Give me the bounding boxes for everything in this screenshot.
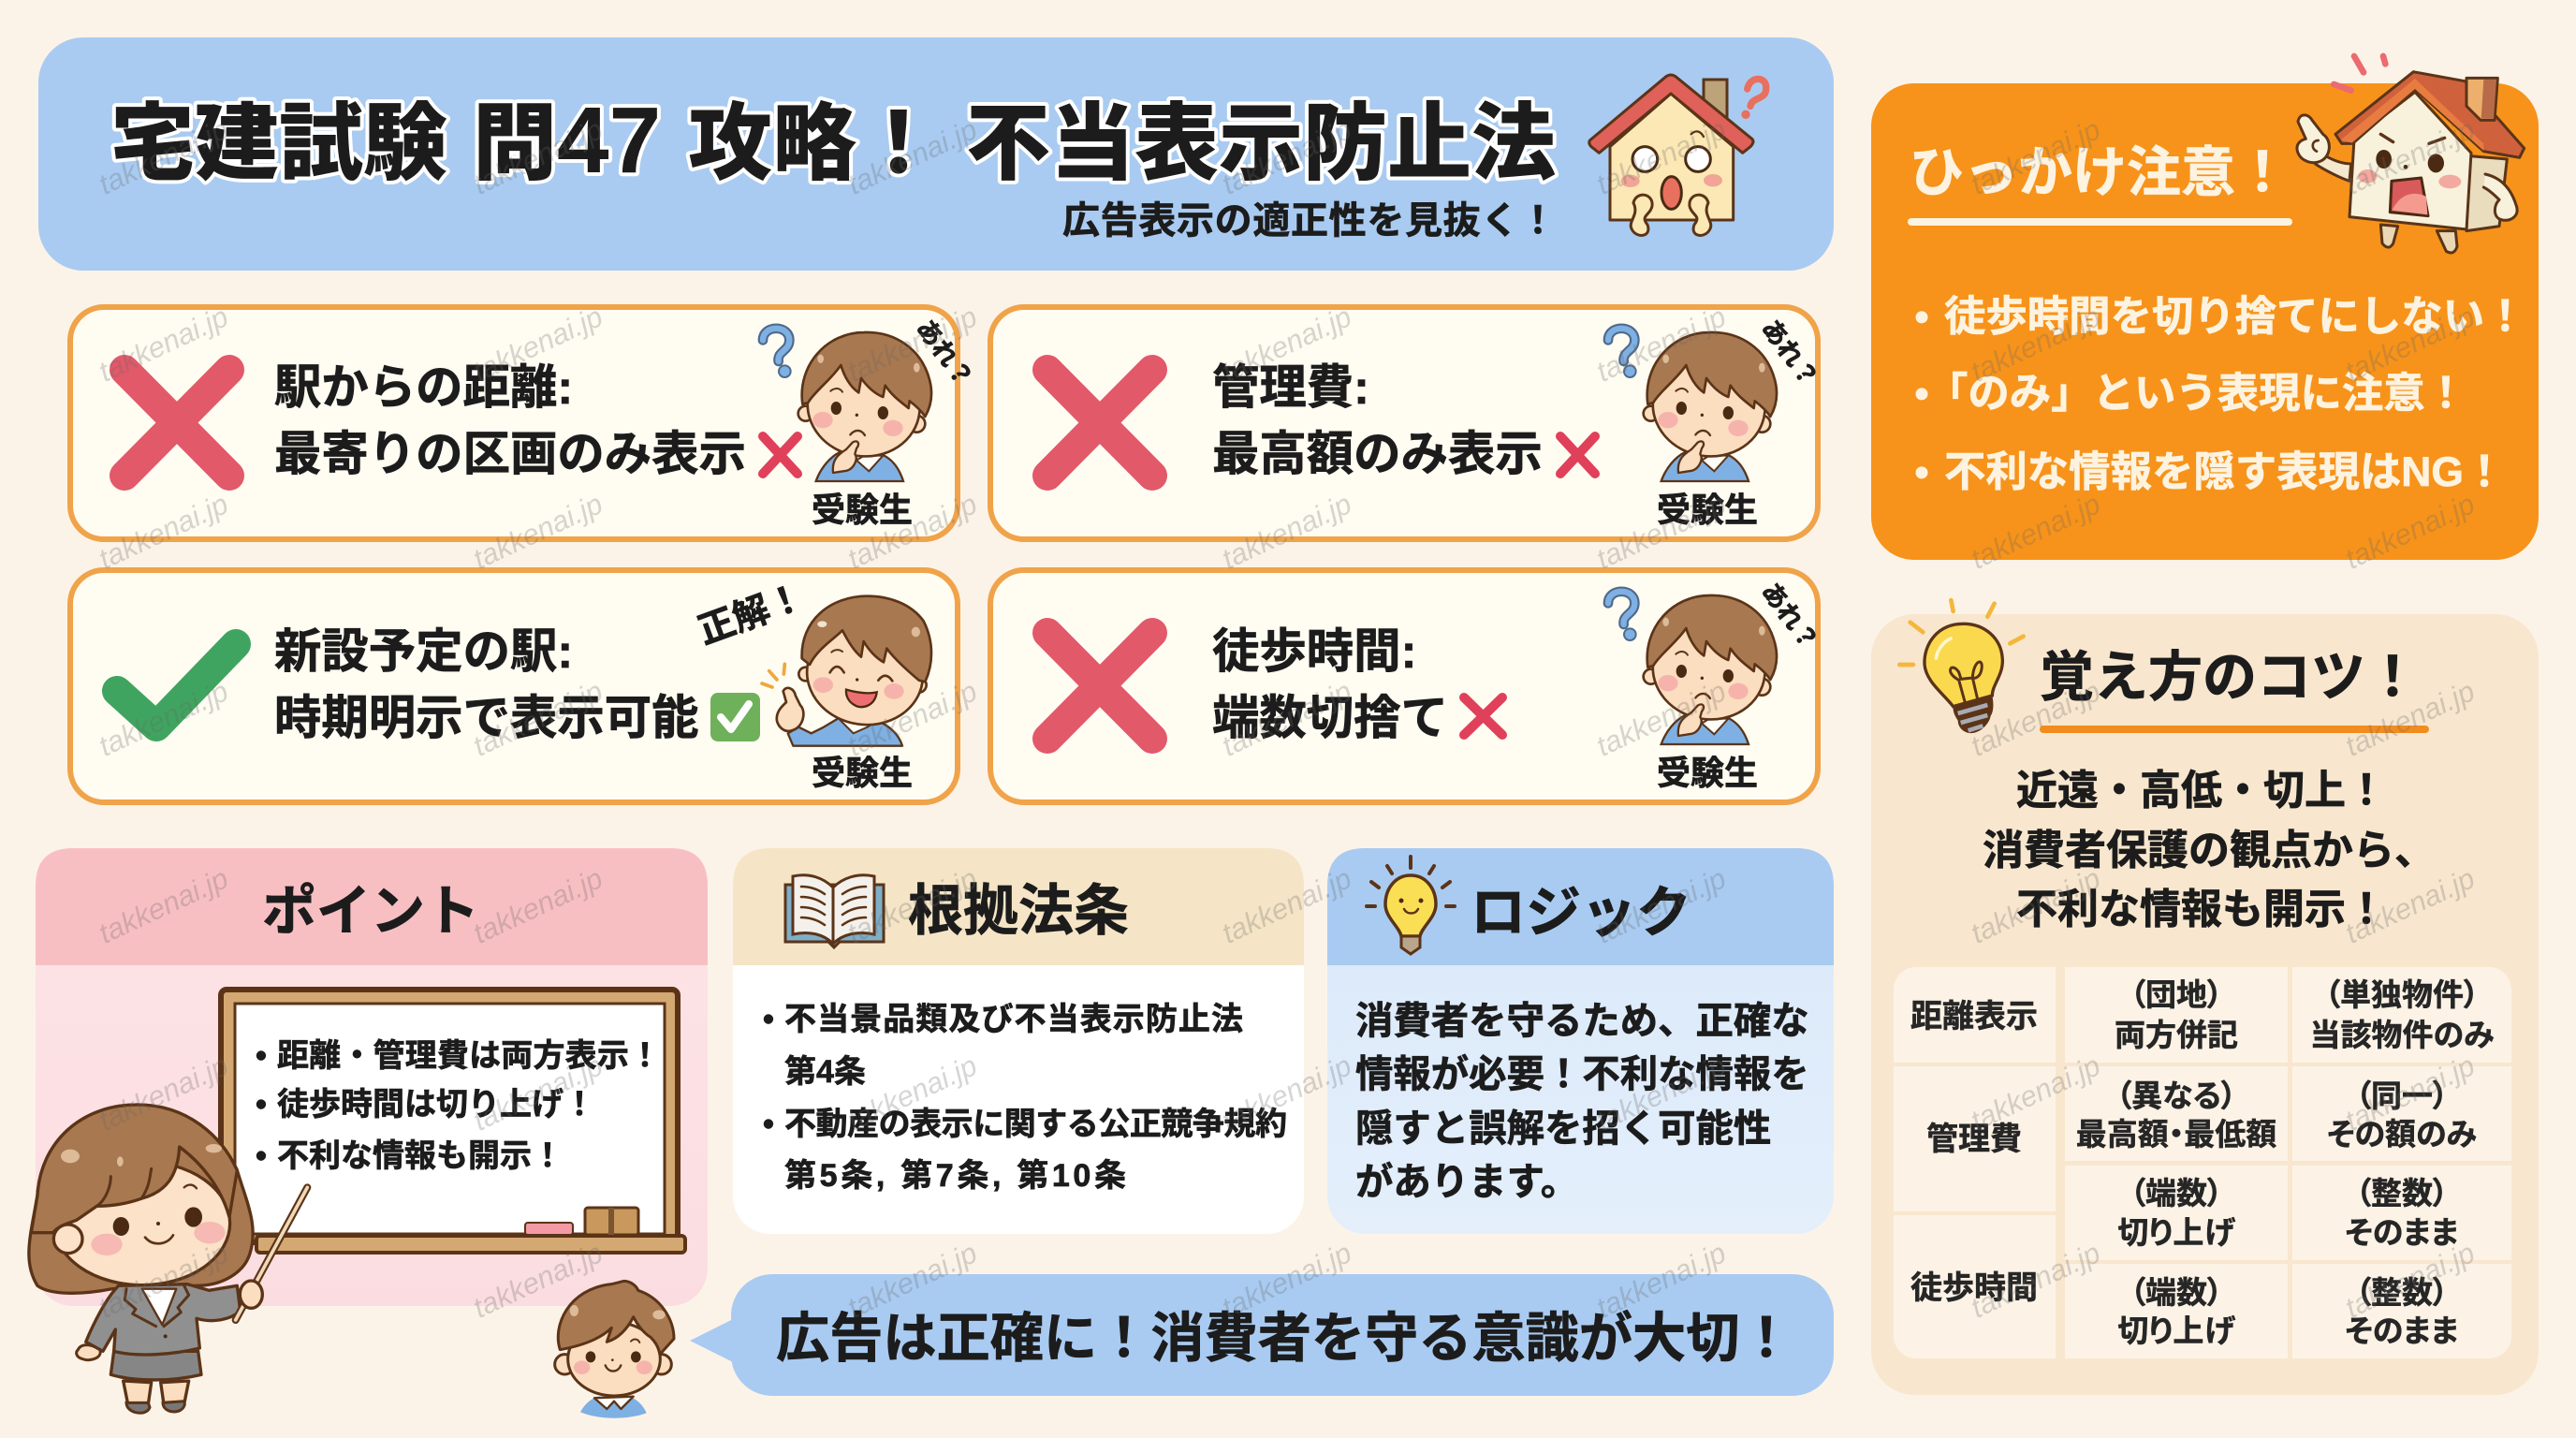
watermark grid: takkenai.jp bbox=[842, 487, 982, 576]
watermark grid: takkenai.jp bbox=[1217, 1049, 1356, 1137]
panel header bbox=[1327, 848, 1834, 965]
icon: cross bbox=[124, 370, 229, 476]
icon: check mark bbox=[117, 644, 236, 726]
label: student: 受験生 bbox=[1657, 754, 1758, 792]
comparison table: （整数） bbox=[2355, 1275, 2449, 1310]
watermark grid: takkenai.jp bbox=[842, 674, 982, 763]
warning list: • bbox=[1914, 450, 1929, 495]
watermark grid: takkenai.jp bbox=[2340, 487, 2480, 576]
watermark grid: takkenai.jp bbox=[468, 112, 607, 201]
panel: point bbox=[36, 848, 708, 1306]
heading: 根拠法条 bbox=[908, 880, 1129, 942]
logic text: 隠すと誤解を招く可能性 bbox=[1355, 1107, 1771, 1150]
tip text: 不利な情報も開示！ bbox=[2016, 887, 2387, 932]
logic text: 情報が必要！不利な情報を bbox=[1355, 1052, 1809, 1095]
text block bbox=[1212, 624, 1448, 744]
watermark grid: takkenai.jp bbox=[468, 1049, 607, 1137]
legal text list: • bbox=[763, 1107, 774, 1142]
title: 宅建試験 bbox=[110, 97, 447, 191]
logic text: があります。 bbox=[1355, 1160, 1578, 1203]
watermark grid: takkenai.jp bbox=[94, 487, 233, 576]
watermark grid bbox=[94, 112, 2480, 1325]
watermark grid: takkenai.jp bbox=[1217, 487, 1356, 576]
panel: card new station bbox=[70, 570, 958, 802]
callout: 広告は正確に！消費者を守る意識が大切！ bbox=[776, 1309, 1793, 1369]
warning list: 不利な情報を隠す表現はNG！ bbox=[1944, 449, 2505, 495]
watermark grid: takkenai.jp bbox=[2340, 112, 2480, 201]
comparison table: そのまま bbox=[2345, 1313, 2459, 1348]
title: 不当表示防止法 bbox=[966, 97, 1556, 191]
icon: light bulb bbox=[1899, 600, 2024, 733]
legal text list: 第4条 bbox=[784, 1054, 866, 1090]
icon: small cross bbox=[1560, 436, 1595, 474]
icon: small check box bbox=[710, 693, 760, 741]
speech: correct: 正解！ bbox=[693, 577, 810, 652]
title: 問47 bbox=[473, 88, 661, 193]
text block: 時期明示で表示可能 bbox=[274, 691, 699, 744]
comparison table: 両方併記 bbox=[2115, 1018, 2238, 1052]
watermark grid: takkenai.jp bbox=[1591, 1236, 1731, 1325]
warning list bbox=[1914, 294, 2525, 495]
icon: surprised house bbox=[1589, 75, 1766, 235]
tip text: 近遠・高低・切上！ bbox=[2016, 768, 2387, 814]
comparison table: （同一） bbox=[2355, 1078, 2449, 1113]
watermark grid: takkenai.jp bbox=[1966, 487, 2105, 576]
heading underline bbox=[1908, 218, 2292, 226]
watermark grid: takkenai.jp bbox=[1966, 1236, 2105, 1325]
watermark grid: takkenai.jp bbox=[1217, 674, 1356, 763]
watermark grid: takkenai.jp bbox=[2340, 1236, 2480, 1325]
whiteboard bbox=[221, 990, 685, 1253]
comparison table: そのまま bbox=[2345, 1215, 2459, 1250]
watermark grid: takkenai.jp bbox=[842, 112, 982, 201]
comparison table: 当該物件のみ bbox=[2310, 1018, 2494, 1052]
watermark grid: takkenai.jp bbox=[1591, 487, 1731, 576]
heading: ロジック bbox=[1471, 882, 1691, 944]
watermark grid: takkenai.jp bbox=[94, 1236, 233, 1325]
comparison table: 最高額・最低額 bbox=[2076, 1117, 2276, 1152]
watermark grid: takkenai.jp bbox=[468, 300, 607, 389]
whiteboard bullet list: • bbox=[256, 1087, 267, 1123]
text block bbox=[274, 360, 746, 480]
text block bbox=[1212, 360, 1543, 480]
text block: 新設予定の駅: bbox=[274, 624, 573, 678]
logic text bbox=[1355, 999, 1809, 1203]
watermark grid: takkenai.jp bbox=[1591, 300, 1731, 389]
comparison table: その額のみ bbox=[2327, 1117, 2477, 1152]
watermark grid: takkenai.jp bbox=[94, 112, 233, 201]
character: puzzled student bbox=[1608, 329, 1777, 481]
watermark grid: takkenai.jp bbox=[1966, 112, 2105, 201]
tip text: 消費者保護の観点から、 bbox=[1983, 828, 2436, 873]
character: small student bbox=[555, 1281, 674, 1418]
title: 攻略！ bbox=[688, 97, 941, 191]
watermark grid: takkenai.jp bbox=[2340, 1049, 2480, 1137]
panel: card management fee bbox=[990, 307, 1823, 539]
comparison table: 徒歩時間 bbox=[1910, 1270, 2038, 1306]
comparison table: （団地） bbox=[2130, 977, 2222, 1012]
heading: ポイント bbox=[262, 881, 479, 942]
comparison table: 切り上げ bbox=[2117, 1313, 2236, 1348]
watermark grid: takkenai.jp bbox=[1591, 112, 1731, 201]
text block: 最高額のみ表示 bbox=[1212, 427, 1543, 480]
icon: small cross bbox=[1464, 697, 1502, 735]
panel: card walking time bbox=[990, 570, 1823, 802]
watermark grid: takkenai.jp bbox=[1966, 300, 2105, 389]
comparison table: （端数） bbox=[2130, 1275, 2222, 1310]
text block: 管理費: bbox=[1212, 360, 1369, 414]
label: student: 受験生 bbox=[812, 754, 913, 792]
comparison table: 切り上げ bbox=[2117, 1215, 2236, 1250]
comparison table: （整数） bbox=[2355, 1176, 2449, 1211]
speech: are: あれ？ bbox=[1756, 315, 1823, 392]
watermark grid: takkenai.jp bbox=[1217, 300, 1356, 389]
whiteboard bullet list bbox=[256, 1038, 661, 1174]
speech: are: あれ？ bbox=[1756, 578, 1823, 655]
panel: legal basis bbox=[733, 848, 1304, 1234]
subtitle: 広告表示の適正性を見抜く！ bbox=[1062, 200, 1557, 242]
icon: angry house bbox=[2297, 56, 2525, 253]
whiteboard bullet list: 徒歩時間は切り上げ！ bbox=[277, 1087, 595, 1123]
panel: memorization tips bbox=[1871, 600, 2539, 1395]
header banner bbox=[38, 37, 1834, 271]
text block: 駅からの距離: bbox=[274, 360, 573, 414]
whiteboard bullet list: 不利な情報も開示！ bbox=[277, 1138, 564, 1174]
warning list: • bbox=[1914, 295, 1929, 340]
heading: 覚え方のコツ！ bbox=[2040, 647, 2420, 708]
icon: smiling bulb bbox=[1367, 857, 1455, 954]
watermark grid: takkenai.jp bbox=[1966, 1049, 2105, 1137]
comparison table: （端数） bbox=[2130, 1176, 2222, 1211]
watermark grid: takkenai.jp bbox=[1591, 861, 1731, 950]
watermark grid: takkenai.jp bbox=[1591, 674, 1731, 763]
comparison table bbox=[1894, 967, 2511, 1358]
watermark grid: takkenai.jp bbox=[842, 1236, 982, 1325]
watermark grid: takkenai.jp bbox=[2340, 300, 2480, 389]
text block bbox=[274, 624, 699, 744]
tip text bbox=[1983, 768, 2436, 932]
label: student: 受験生 bbox=[812, 491, 913, 529]
panel header bbox=[36, 848, 708, 965]
text block: 最寄りの区画のみ表示 bbox=[274, 427, 746, 480]
watermark grid: takkenai.jp bbox=[468, 1236, 607, 1325]
comparison table: （異なる） bbox=[2116, 1078, 2236, 1113]
panel: trick warning bbox=[1871, 56, 2539, 560]
watermark grid: takkenai.jp bbox=[1966, 861, 2105, 950]
watermark grid: takkenai.jp bbox=[1591, 1049, 1731, 1137]
comparison table: 管理費 bbox=[1926, 1122, 2022, 1157]
warning list: 徒歩時間を切り捨てにしない！ bbox=[1944, 294, 2525, 340]
comparison table: （単独物件） bbox=[2325, 977, 2479, 1012]
icon: small cross bbox=[763, 436, 798, 474]
legal text list: 不動産の表示に関する公正競争規約 bbox=[784, 1107, 1287, 1142]
watermark grid: takkenai.jp bbox=[468, 861, 607, 950]
label: student: 受験生 bbox=[1657, 491, 1758, 529]
heading underline bbox=[2040, 726, 2429, 733]
logic text: 消費者を守るため、正確な bbox=[1355, 999, 1809, 1042]
watermark grid: takkenai.jp bbox=[2340, 674, 2480, 763]
warning list: • bbox=[1914, 372, 1929, 417]
character: happy student bbox=[762, 596, 931, 746]
whiteboard bullet list: • bbox=[256, 1038, 267, 1074]
character: teacher with pointer bbox=[29, 1105, 307, 1413]
panel: logic bbox=[1327, 848, 1834, 1234]
watermark grid: takkenai.jp bbox=[842, 1049, 982, 1137]
legal text list: 第5条, 第7条, 第10条 bbox=[784, 1158, 1126, 1194]
callout bbox=[690, 1274, 1834, 1396]
watermark grid: takkenai.jp bbox=[1217, 1236, 1356, 1325]
legal text list: 不当景品類及び不当表示防止法 bbox=[784, 1002, 1243, 1037]
heading: ひっかけ注意！ bbox=[1910, 142, 2290, 203]
panel header bbox=[733, 848, 1304, 965]
legal text list: • bbox=[763, 1002, 774, 1037]
watermark grid: takkenai.jp bbox=[2340, 861, 2480, 950]
warning list: 「のみ」という表現に注意！ bbox=[1926, 371, 2466, 417]
title bbox=[110, 88, 1556, 193]
watermark grid: takkenai.jp bbox=[94, 1049, 233, 1137]
comparison table: 距離表示 bbox=[1910, 999, 2038, 1034]
icon: cross bbox=[1047, 633, 1152, 739]
icon: cross bbox=[1047, 370, 1152, 476]
icon: open book bbox=[785, 875, 884, 947]
legal text list bbox=[763, 1002, 1287, 1194]
watermark grid: takkenai.jp bbox=[94, 861, 233, 950]
whiteboard bullet list: 距離・管理費は両方表示！ bbox=[277, 1038, 661, 1074]
panel: card distance bbox=[70, 307, 978, 539]
watermark grid: takkenai.jp bbox=[1217, 861, 1356, 950]
watermark grid: takkenai.jp bbox=[468, 674, 607, 763]
watermark grid: takkenai.jp bbox=[842, 300, 982, 389]
watermark grid: takkenai.jp bbox=[1217, 112, 1356, 201]
text block: 端数切捨て bbox=[1212, 691, 1448, 744]
watermark grid: takkenai.jp bbox=[468, 487, 607, 576]
watermark grid: takkenai.jp bbox=[1966, 674, 2105, 763]
watermark grid: takkenai.jp bbox=[94, 300, 233, 389]
watermark grid: takkenai.jp bbox=[842, 861, 982, 950]
text block: 徒歩時間: bbox=[1212, 624, 1416, 678]
character: puzzled student bbox=[1608, 592, 1777, 744]
character: puzzled student bbox=[763, 329, 931, 481]
watermark grid: takkenai.jp bbox=[94, 674, 233, 763]
speech: are: あれ？ bbox=[911, 315, 978, 392]
whiteboard bullet list: • bbox=[256, 1138, 267, 1174]
